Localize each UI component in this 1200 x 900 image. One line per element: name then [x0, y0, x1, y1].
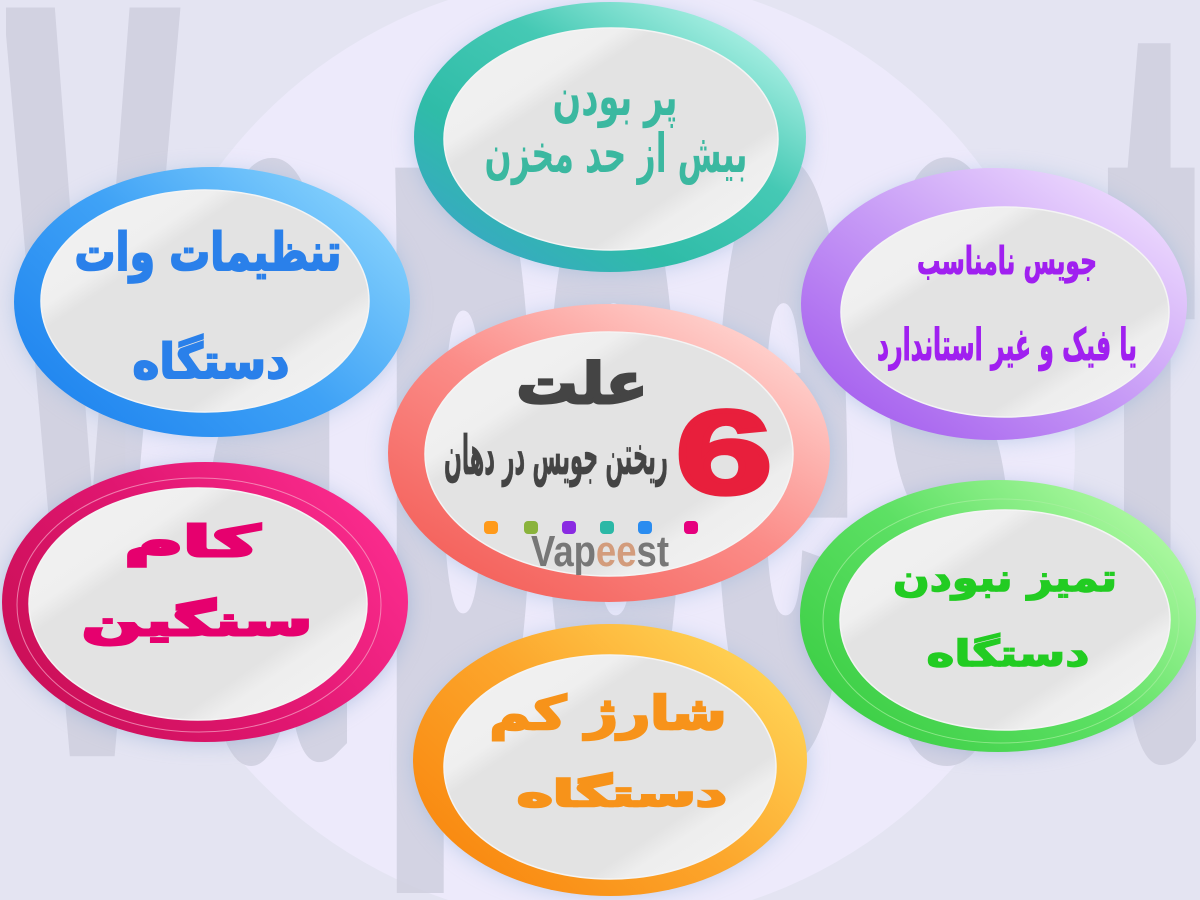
- ring: [388, 304, 830, 602]
- ring: [801, 168, 1187, 440]
- panel: overfilling tank (teal): [414, 2, 806, 272]
- label line 1: تنظیمات وات: [74, 223, 342, 283]
- panel: unclean device (green): [800, 480, 1196, 752]
- ring: [414, 2, 806, 272]
- plate: [840, 510, 1170, 730]
- panel: center title (coral): ریختن جویس در دهان: [444, 424, 668, 487]
- plate: [41, 190, 369, 412]
- plate: [841, 207, 1169, 417]
- label line 2: دستگاه: [132, 334, 290, 390]
- ring: [2, 462, 408, 742]
- label line 1: پر بودن: [552, 65, 678, 128]
- heading: cause: علت: [516, 352, 648, 417]
- label line 2: دستگاه: [517, 773, 727, 815]
- plate: [29, 488, 367, 720]
- plate: [444, 28, 778, 250]
- panel: low device charge (orange): [413, 624, 807, 896]
- brand: Vapeest: Vapeest: [531, 527, 669, 576]
- label line 2: بیش از حد مخزن: [484, 122, 748, 185]
- panel: heavy draw (magenta): [2, 462, 408, 742]
- ring: [14, 167, 410, 437]
- panel: unsuitable juice (purple): [801, 168, 1187, 440]
- panel: wattage settings (blue): [14, 167, 410, 437]
- ring: [800, 480, 1196, 752]
- label line 1: کام: [124, 517, 261, 567]
- label line 1: تمیز نبودن: [893, 556, 1117, 600]
- plate: [425, 332, 793, 576]
- panel: center title (coral): [388, 304, 830, 602]
- color dots: [484, 521, 698, 534]
- ring: [413, 624, 807, 896]
- label line 1: شارژ کم: [490, 686, 726, 740]
- label line 2: سنگین: [82, 598, 312, 645]
- plate: [444, 655, 776, 879]
- label line 2: دستگاه: [926, 633, 1090, 675]
- number 6: 6: [676, 387, 772, 519]
